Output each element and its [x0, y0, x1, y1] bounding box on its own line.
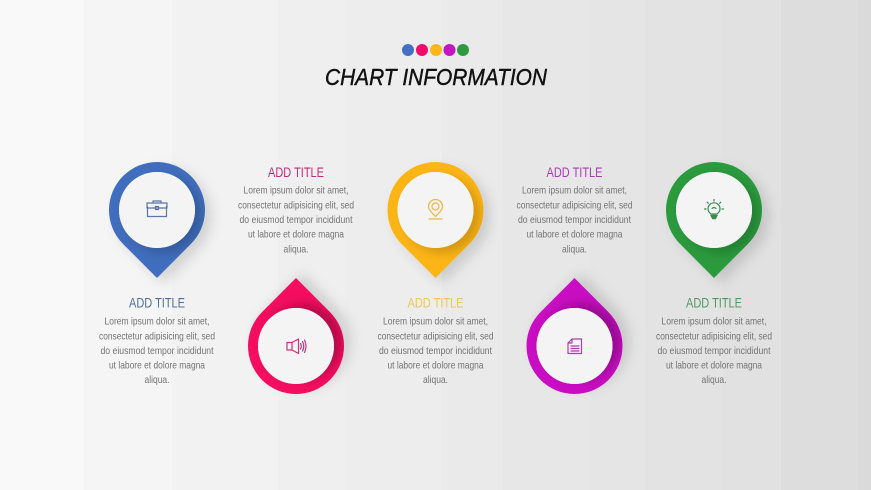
title: CHART INFORMATION [325, 64, 547, 90]
pin: pink [248, 278, 344, 394]
text: yellow block: ut labore et dolore magna [388, 360, 484, 372]
text: blue block [99, 296, 215, 386]
icon: speaker [287, 339, 306, 354]
text: pink block: do eiusmod tempor incididunt [240, 214, 353, 226]
text: pink block: consectetur adipisicing elit, sed [238, 200, 354, 212]
text: green block: do eiusmod tempor incididunt [658, 345, 771, 357]
text: green block: ut labore et dolore magna [666, 360, 762, 372]
pin: green [666, 162, 762, 278]
text: pink block: ut labore et dolore magna [248, 228, 344, 240]
text: pink block [238, 165, 354, 256]
text: blue block: ut labore et dolore magna [109, 360, 205, 372]
text: yellow block: Lorem ipsum dolor sit amet, [383, 316, 488, 328]
icon: briefcase [147, 201, 167, 216]
text: green block: consectetur adipisicing elit, sed [656, 330, 772, 342]
text: blue block: do eiusmod tempor incididunt [100, 345, 214, 357]
text: purple block: Lorem ipsum dolor sit amet, [522, 184, 627, 196]
text: blue block: Lorem ipsum dolor sit amet, [104, 316, 210, 328]
text: green block: aliqua. [702, 374, 726, 386]
text: yellow block [378, 296, 494, 386]
icon: light bulb [704, 200, 724, 218]
text: purple block: ADD TITLE [546, 165, 602, 180]
text: blue block: ADD TITLE [129, 296, 185, 310]
pin: blue [109, 162, 205, 278]
text: purple block: do eiusmod tempor incididunt [518, 214, 631, 226]
icon: map marker [428, 200, 442, 219]
text: pink block: aliqua. [284, 244, 308, 256]
text: purple block: aliqua. [562, 244, 587, 256]
text: pink block: ADD TITLE [268, 165, 324, 180]
icon: document [568, 339, 582, 354]
text: yellow block: aliqua. [423, 374, 448, 386]
text: green block: ADD TITLE [686, 296, 742, 310]
text: yellow block: consectetur adipisicing elit, sed [378, 330, 494, 342]
pin: yellow [388, 162, 483, 278]
text: purple block: ut labore et dolore magna [526, 228, 623, 240]
text: blue block: consectetur adipisicing elit, sed [99, 330, 215, 342]
text: green block: Lorem ipsum dolor sit amet, [662, 316, 766, 328]
text: green block [656, 296, 772, 386]
text: purple block: consectetur adipisicing elit, sed [516, 200, 633, 212]
text: pink block: Lorem ipsum dolor sit amet, [244, 184, 348, 196]
pin: purple [526, 278, 622, 394]
text: blue block: aliqua. [144, 374, 170, 386]
colour dots [402, 44, 469, 56]
text: yellow block: ADD TITLE [408, 296, 464, 310]
text: yellow block: do eiusmod tempor incididunt [379, 345, 492, 357]
text: purple block [516, 165, 633, 256]
